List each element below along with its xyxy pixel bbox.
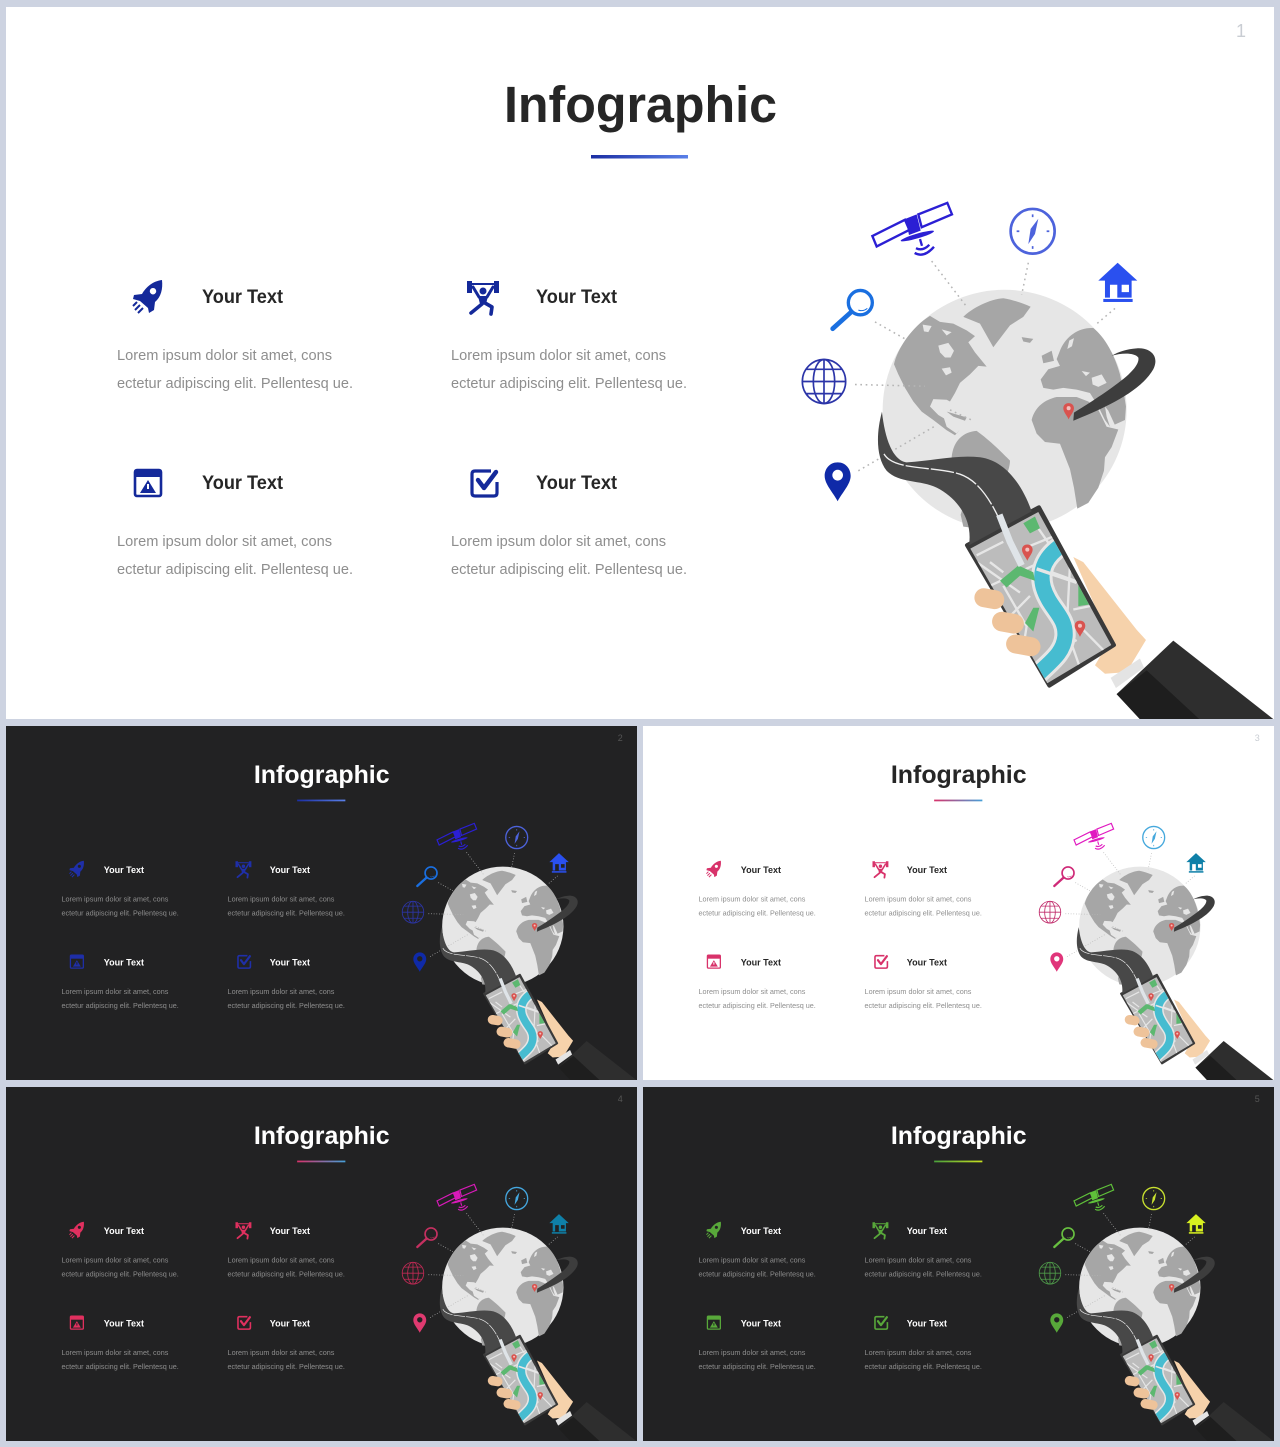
heading: bottom right: Your Text <box>536 473 618 494</box>
road <box>878 412 1032 566</box>
icon: globe grid <box>1039 1262 1061 1284</box>
heading: top right: Your Text <box>907 865 948 876</box>
dotted connectors <box>428 1213 558 1318</box>
icon: rocket <box>69 861 84 877</box>
panel: main white slide <box>6 7 1274 719</box>
text block: bottom right: ectetur adipiscing elit. Pellentesq ue. <box>865 1362 982 1371</box>
globe <box>1079 867 1200 986</box>
text block: top right: Lorem ipsum dolor sit amet, cons <box>228 895 335 904</box>
icon: weightlifter <box>467 281 499 314</box>
hand palm <box>1174 1360 1210 1419</box>
icon: checkbox <box>238 956 250 968</box>
icon: map pin <box>1050 952 1063 972</box>
text block: top right: Lorem ipsum dolor sit amet, cons <box>451 347 666 364</box>
text block: bottom left: Lorem ipsum dolor sit amet, cons <box>698 987 806 996</box>
sleeve <box>555 1041 638 1082</box>
icon: compass <box>506 826 528 849</box>
icon: house <box>549 853 569 873</box>
heading: top right: Your Text <box>270 865 311 876</box>
icon: magnifier <box>1054 1228 1074 1247</box>
icon: weightlifter <box>872 1222 888 1239</box>
page number: 2 <box>618 733 623 743</box>
icon: browser window warning <box>707 1316 720 1329</box>
text block: top left <box>698 1256 816 1278</box>
globe <box>442 867 563 986</box>
illustration: globe, road, phone and hand <box>1039 823 1275 1082</box>
icon: map pin <box>1050 1313 1063 1333</box>
text block: top left: ectetur adipiscing elit. Pellentesq ue. <box>117 375 353 392</box>
text block: top left: Lorem ipsum dolor sit amet, cons <box>61 895 169 904</box>
heading: bottom left: Your Text <box>104 1319 145 1330</box>
icon: compass <box>1143 826 1165 849</box>
icon: house <box>1186 853 1206 873</box>
icon: browser window warning <box>135 470 161 496</box>
road <box>1077 927 1153 1004</box>
orbit road <box>537 896 578 932</box>
text block: top right <box>865 895 982 917</box>
text block: top left: ectetur adipiscing elit. Pellentesq ue. <box>698 908 816 917</box>
page number: 5 <box>1255 1094 1260 1104</box>
icon: satellite <box>1074 823 1114 849</box>
hand palm <box>537 1360 573 1419</box>
location pin on globe <box>532 923 537 931</box>
text block: top right <box>228 895 345 917</box>
icon: magnifier <box>417 867 437 886</box>
road <box>440 927 516 1004</box>
title underline <box>297 800 345 801</box>
icon: checkbox <box>875 956 887 968</box>
heading: bottom left: Your Text <box>741 958 782 969</box>
text block: top left: ectetur adipiscing elit. Pellentesq ue. <box>61 908 179 917</box>
icon: browser window warning <box>70 1316 83 1329</box>
text block: top right: ectetur adipiscing elit. Pellentesq ue. <box>228 1269 345 1278</box>
icon: rocket <box>706 861 721 877</box>
icon: globe grid <box>1039 901 1061 923</box>
location pin on globe <box>532 1284 537 1292</box>
fingers <box>487 1014 521 1050</box>
dotted connectors <box>1065 852 1195 957</box>
text block: bottom left <box>117 533 353 578</box>
icon: satellite <box>872 203 952 255</box>
text block: top right: Lorem ipsum dolor sit amet, cons <box>865 1256 972 1265</box>
phone with map <box>1116 1334 1199 1425</box>
text block: bottom left <box>61 1348 179 1371</box>
icon: magnifier <box>1054 867 1074 886</box>
text block: top right: ectetur adipiscing elit. Pellentesq ue. <box>451 375 687 392</box>
heading: top right: Your Text <box>270 1226 311 1237</box>
text block: bottom right: ectetur adipiscing elit. Pellentesq ue. <box>451 561 687 578</box>
icon: magnifier <box>417 1228 437 1247</box>
fingers <box>1124 1375 1158 1411</box>
sleeve <box>1111 641 1276 723</box>
text block: top left <box>61 1256 179 1278</box>
icon: globe grid <box>802 359 846 403</box>
illustration: globe, road, phone and hand <box>402 823 638 1082</box>
text block: bottom left: ectetur adipiscing elit. Pellentesq ue. <box>698 1001 816 1010</box>
title underline <box>297 1161 345 1162</box>
heading: bottom right: Your Text <box>907 1319 948 1330</box>
text block: bottom left <box>698 1348 816 1371</box>
text block: bottom right: ectetur adipiscing elit. Pellentesq ue. <box>228 1001 345 1010</box>
text block: top right: ectetur adipiscing elit. Pellentesq ue. <box>228 908 345 917</box>
text block: bottom left: ectetur adipiscing elit. Pellentesq ue. <box>61 1362 179 1371</box>
title: Infographic <box>504 76 777 133</box>
panel: white pink slide <box>643 726 1274 1080</box>
icon: rocket <box>706 1222 721 1238</box>
globe <box>1079 1228 1200 1347</box>
icon: satellite <box>437 1184 477 1210</box>
icon: rocket <box>69 1222 84 1238</box>
text block: bottom left: ectetur adipiscing elit. Pellentesq ue. <box>117 561 353 578</box>
fingers <box>1124 1014 1158 1050</box>
heading: top left: Your Text <box>104 865 145 876</box>
icon: house <box>549 1214 569 1234</box>
orbit road <box>537 1257 578 1293</box>
text block: top left: Lorem ipsum dolor sit amet, cons <box>698 895 806 904</box>
text block: top right <box>865 1256 982 1278</box>
fingers <box>973 587 1042 658</box>
phone with map <box>1116 973 1199 1064</box>
icon: satellite <box>437 823 477 849</box>
text block: top left: Lorem ipsum dolor sit amet, cons <box>117 347 332 364</box>
text block: top right: Lorem ipsum dolor sit amet, cons <box>865 895 972 904</box>
sleeve <box>1192 1041 1275 1082</box>
orbit road <box>1073 348 1155 421</box>
road <box>1077 1288 1153 1365</box>
page number: 1 <box>1236 21 1246 41</box>
globe <box>442 1228 563 1347</box>
illustration: globe, road, phone and hand <box>402 1184 638 1443</box>
text block: bottom right <box>865 987 982 1010</box>
icon: map pin <box>413 1313 426 1333</box>
heading: bottom right: Your Text <box>270 1319 311 1330</box>
icon: browser window warning <box>707 955 720 968</box>
fingers <box>487 1375 521 1411</box>
icon: checkbox <box>238 1317 250 1329</box>
title: Infographic <box>891 1122 1027 1150</box>
panel: dark pink slide <box>6 1087 637 1441</box>
icon: compass <box>1011 209 1055 254</box>
text block: top right: Lorem ipsum dolor sit amet, cons <box>228 1256 335 1265</box>
text block: top left: Lorem ipsum dolor sit amet, cons <box>61 1256 169 1265</box>
text block: top left <box>61 895 179 917</box>
icon: magnifier <box>833 290 872 329</box>
icon: rocket <box>133 280 162 313</box>
icon: weightlifter <box>235 861 251 878</box>
heading: bottom right: Your Text <box>270 958 311 969</box>
dotted connectors <box>855 261 1115 471</box>
heading: top left: Your Text <box>202 287 284 308</box>
icon: weightlifter <box>235 1222 251 1239</box>
text block: top right <box>451 347 687 392</box>
text block: bottom left: Lorem ipsum dolor sit amet, cons <box>61 1348 169 1357</box>
text block: bottom right: ectetur adipiscing elit. Pellentesq ue. <box>865 1001 982 1010</box>
page number: 4 <box>618 1094 623 1104</box>
text block: bottom right <box>228 1348 345 1371</box>
heading: top right: Your Text <box>536 287 618 308</box>
text block: bottom left: ectetur adipiscing elit. Pellentesq ue. <box>698 1362 816 1371</box>
orbit road <box>1174 1257 1215 1293</box>
heading: top right: Your Text <box>907 1226 948 1237</box>
icon: checkbox <box>472 471 497 496</box>
hand palm <box>1073 557 1146 674</box>
text block: bottom right: Lorem ipsum dolor sit amet, cons <box>865 1348 972 1357</box>
text block: bottom right: Lorem ipsum dolor sit amet, cons <box>228 987 335 996</box>
icon: map pin <box>825 462 851 501</box>
text block: top right <box>228 1256 345 1278</box>
text block: bottom right <box>451 533 687 578</box>
icon: weightlifter <box>872 861 888 878</box>
title: Infographic <box>891 761 1027 789</box>
location pin on globe <box>1063 403 1074 419</box>
road <box>440 1288 516 1365</box>
text block: bottom right <box>228 987 345 1010</box>
phone with map <box>957 505 1123 687</box>
illustration: globe, road, phone and hand <box>1039 1184 1275 1443</box>
icon: globe grid <box>402 1262 424 1284</box>
hand palm <box>537 999 573 1058</box>
title: Infographic <box>254 761 390 789</box>
page number: 3 <box>1255 733 1260 743</box>
text block: top right: ectetur adipiscing elit. Pellentesq ue. <box>865 1269 982 1278</box>
text block: bottom right: Lorem ipsum dolor sit amet, cons <box>451 533 666 550</box>
icon: checkbox <box>875 1317 887 1329</box>
icon: satellite <box>1074 1184 1114 1210</box>
text block: top left: ectetur adipiscing elit. Pellentesq ue. <box>698 1269 816 1278</box>
illustration: globe, road, phone and hand <box>802 203 1276 723</box>
orbit road <box>1174 896 1215 932</box>
phone with map <box>479 1334 562 1425</box>
text block: bottom left: Lorem ipsum dolor sit amet, cons <box>61 987 169 996</box>
heading: bottom left: Your Text <box>202 473 284 494</box>
heading: bottom right: Your Text <box>907 958 948 969</box>
text block: bottom left: ectetur adipiscing elit. Pellentesq ue. <box>61 1001 179 1010</box>
globe <box>883 290 1127 530</box>
hand palm <box>1174 999 1210 1058</box>
text block: bottom left: Lorem ipsum dolor sit amet, cons <box>698 1348 806 1357</box>
heading: top left: Your Text <box>741 865 782 876</box>
text block: bottom right: Lorem ipsum dolor sit amet, cons <box>228 1348 335 1357</box>
icon: browser window warning <box>70 955 83 968</box>
text block: bottom right: ectetur adipiscing elit. Pellentesq ue. <box>228 1362 345 1371</box>
heading: bottom left: Your Text <box>741 1319 782 1330</box>
text block: bottom right: Lorem ipsum dolor sit amet, cons <box>865 987 972 996</box>
icon: map pin <box>413 952 426 972</box>
icon: house <box>1186 1214 1206 1234</box>
dotted connectors <box>1065 1213 1195 1318</box>
icon: compass <box>1143 1187 1165 1210</box>
text block: top left: ectetur adipiscing elit. Pellentesq ue. <box>61 1269 179 1278</box>
sleeve <box>555 1402 638 1443</box>
text block: bottom left: Lorem ipsum dolor sit amet, cons <box>117 533 332 550</box>
icon: globe grid <box>402 901 424 923</box>
text block: top right: ectetur adipiscing elit. Pellentesq ue. <box>865 908 982 917</box>
text block: top left <box>117 347 353 392</box>
heading: top left: Your Text <box>104 1226 145 1237</box>
title underline <box>934 800 982 801</box>
text block: bottom right <box>865 1348 982 1371</box>
location pin on globe <box>1169 923 1174 931</box>
panel: dark green slide <box>643 1087 1274 1441</box>
icon: house <box>1098 263 1137 302</box>
text block: bottom left <box>61 987 179 1010</box>
title: Infographic <box>254 1122 390 1150</box>
title underline <box>591 155 688 158</box>
phone with map <box>479 973 562 1064</box>
text block: top left <box>698 895 816 917</box>
text block: bottom left <box>698 987 816 1010</box>
text block: top left: Lorem ipsum dolor sit amet, cons <box>698 1256 806 1265</box>
location pin on globe <box>1169 1284 1174 1292</box>
panel: dark blue slide <box>6 726 637 1080</box>
heading: bottom left: Your Text <box>104 958 145 969</box>
sleeve <box>1192 1402 1275 1443</box>
title underline <box>934 1161 982 1162</box>
heading: top left: Your Text <box>741 1226 782 1237</box>
dotted connectors <box>428 852 558 957</box>
icon: compass <box>506 1187 528 1210</box>
